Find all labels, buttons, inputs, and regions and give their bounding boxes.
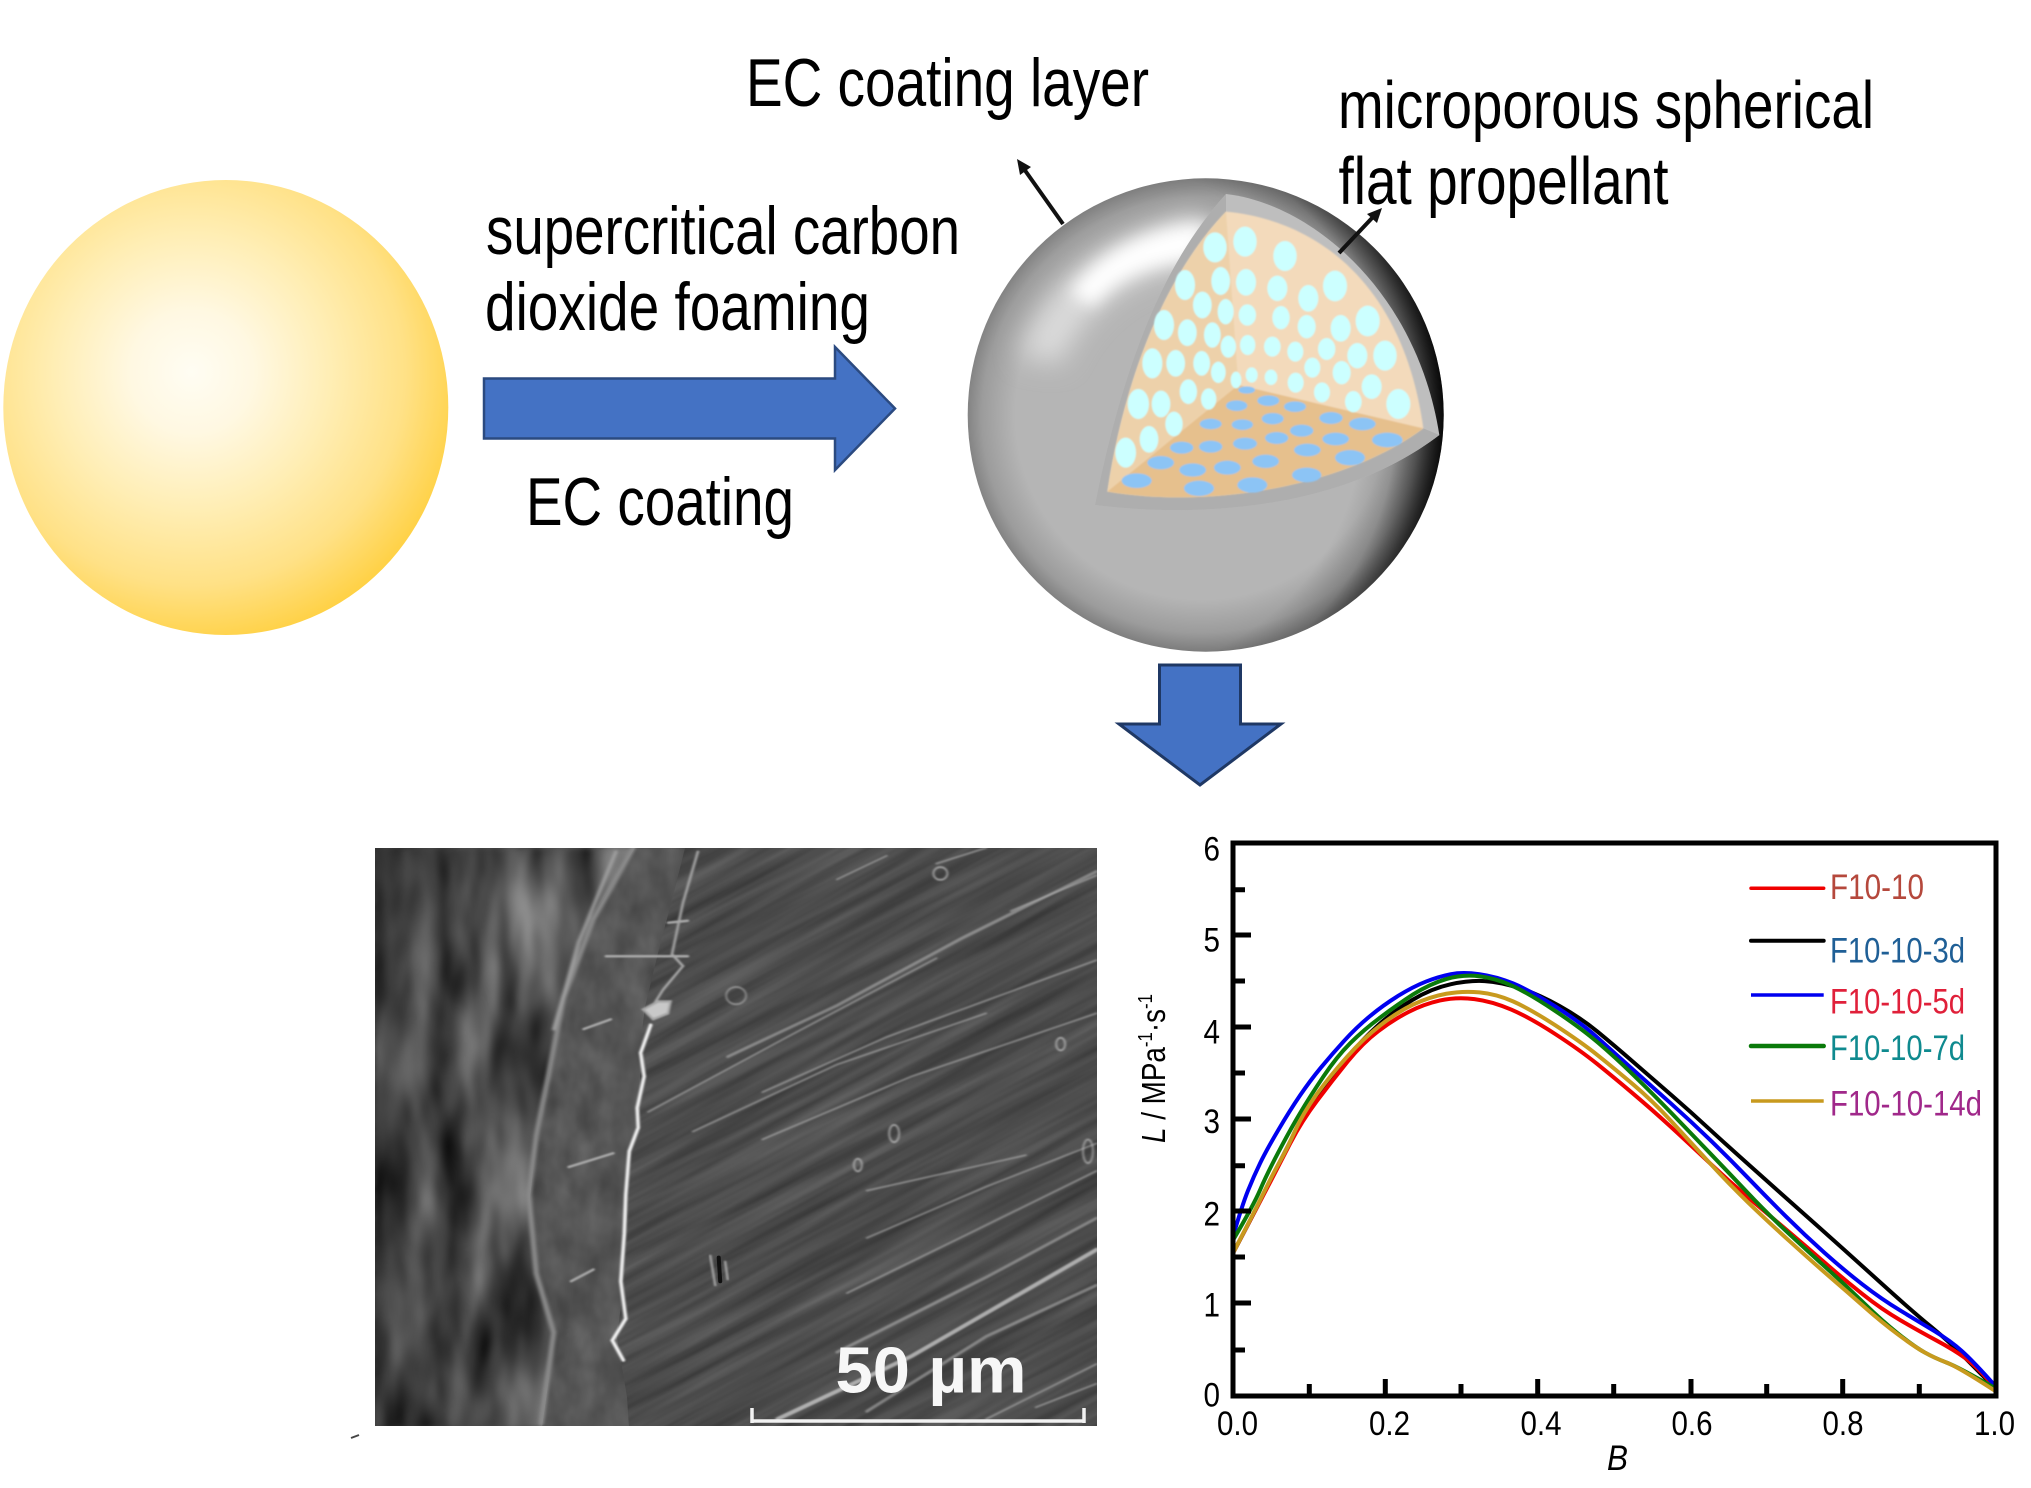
y-axis tick labels: 2 <box>1204 1196 1220 1234</box>
icon: coated sphere with cut-away showing micropores <box>968 178 1444 652</box>
text: EC coating: EC coating <box>526 464 794 540</box>
curve: F10-10-14d <box>1233 992 1996 1391</box>
diagonal scratch highlights <box>648 848 1096 1419</box>
y-axis title: -1 <box>1135 994 1157 1009</box>
legend: F10-10-7d <box>1830 1029 1965 1068</box>
legend: F10-10-14d <box>1830 1085 1982 1124</box>
x-axis tick labels: 0.6 <box>1672 1405 1712 1443</box>
y-axis tick labels: 4 <box>1204 1014 1220 1052</box>
surface defects <box>726 867 1093 1171</box>
bright inner edge of coating <box>612 1025 651 1360</box>
x-axis tick labels: 0.2 <box>1369 1405 1410 1443</box>
texture: blurred background at left <box>375 848 645 1428</box>
text: microporous spherical flat propellant label: microporous spherical <box>1338 68 1874 143</box>
scale bar <box>752 1408 1084 1423</box>
pores: wall pores <box>1115 227 1410 468</box>
y-axis tick labels: 6 <box>1204 830 1220 868</box>
text: EC coating layer label: EC coating layer <box>746 45 1149 121</box>
x-axis tick labels <box>1217 1405 2015 1443</box>
coating band <box>525 848 690 1428</box>
y-axis tick labels: 1 <box>1204 1286 1220 1324</box>
core: left face <box>1107 212 1238 492</box>
curve: F10-10-5d <box>1233 973 1996 1387</box>
legend: F10-10-5d <box>1830 982 1965 1021</box>
core: cross-section with pores <box>1107 212 1423 497</box>
text: microporous spherical flat propellant label <box>1338 68 1874 219</box>
text: microporous spherical flat propellant label: flat propellant <box>1338 144 1669 219</box>
y-axis title: L / MPa <box>1135 1032 1172 1143</box>
x-axis tick labels: 0.8 <box>1822 1405 1864 1443</box>
y-axis tick labels: 0 <box>1204 1376 1220 1414</box>
bright outer edge of coating <box>529 848 633 1423</box>
debris near coating edge <box>569 852 698 1281</box>
small stray mark <box>351 1435 359 1438</box>
y-axis tick labels: 3 <box>1204 1103 1220 1141</box>
x-axis title: B <box>1607 1439 1628 1478</box>
y-axis tick labels <box>1204 830 1220 1414</box>
plot frame and ticks <box>1233 843 1996 1396</box>
icon: solid yellow propellant sphere <box>3 180 448 635</box>
arrow: process arrow right <box>484 347 895 470</box>
text: supercritical carbon dioxide foaming: supercritical carbon <box>486 193 960 269</box>
text: supercritical carbon dioxide foaming <box>485 193 960 345</box>
arrow: pointer to propellant core <box>1339 208 1382 253</box>
shell: cut face of the coating <box>1095 194 1439 510</box>
arrow: process arrow down <box>1119 665 1281 785</box>
x-axis tick labels: 0.4 <box>1520 1405 1562 1443</box>
core: orange propellant right face <box>1107 212 1423 497</box>
curve: F10-10 <box>1233 998 1996 1389</box>
series curves <box>1233 973 1996 1391</box>
y-axis tick labels: 5 <box>1204 922 1220 960</box>
arrow: pointer to EC coating layer <box>1017 159 1063 224</box>
panel: SEM micrograph <box>375 848 1097 1428</box>
curve: F10-10-3d <box>1233 981 1996 1389</box>
y-axis title: ·s <box>1135 1009 1172 1032</box>
chart: L vs B line chart <box>1135 830 2015 1478</box>
y-axis title: -1 <box>1135 1032 1157 1047</box>
legend: F10-10-3d <box>1830 932 1965 971</box>
legend: F10-10 <box>1830 868 1924 907</box>
core: bottom face <box>1107 385 1423 497</box>
label: 50 µm scale text: 50 µm <box>836 1334 1026 1406</box>
legend <box>1751 868 1982 1124</box>
shell: shaded inner band <box>1095 194 1439 510</box>
x-axis tick labels: 0.0 <box>1217 1405 1258 1443</box>
text: supercritical carbon dioxide foaming: dioxide foaming <box>485 269 870 345</box>
curve: F10-10-7d <box>1233 976 1996 1389</box>
texture: diagonal scratches on the surface <box>375 848 1097 1426</box>
pores: floor pores <box>1122 386 1403 496</box>
x-axis tick labels: 1.0 <box>1974 1405 2015 1443</box>
